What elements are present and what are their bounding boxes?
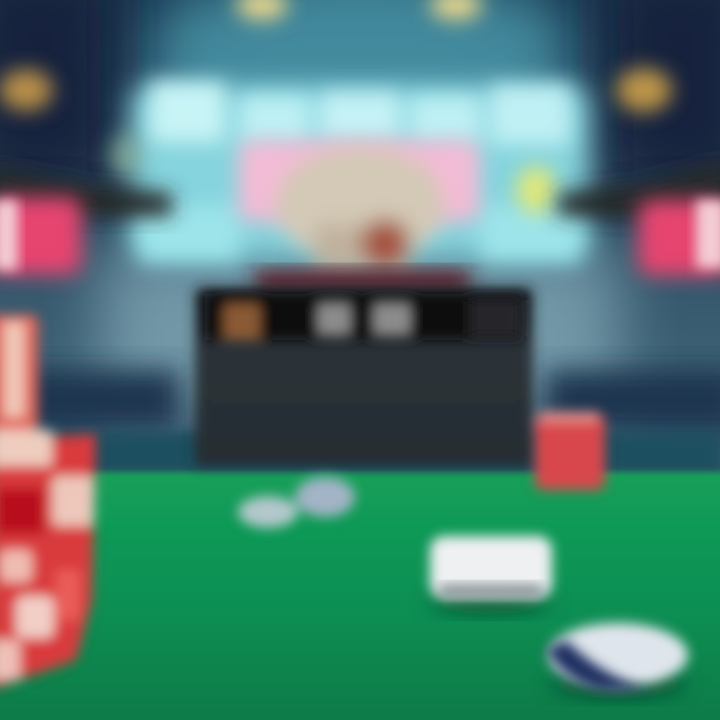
icon: ceiling lights (0, 0, 672, 214)
icon: right arm with pink chip (558, 160, 720, 276)
icon: red and white chip stack (0, 315, 96, 690)
icon: red cup (535, 412, 605, 490)
panel: pink backdrop behind cards (238, 140, 480, 222)
icon: small chips in centre (238, 477, 355, 528)
icon: left arm with pink chip (0, 165, 172, 275)
panel: dark scoreboard (195, 270, 533, 466)
icon: fan of cards (276, 147, 444, 271)
screen: glowing display (130, 82, 590, 260)
scoreboard top strip (205, 294, 523, 340)
icon: blue and white chip (546, 623, 688, 698)
icon: white chip stack (430, 536, 552, 614)
table: green felt (0, 472, 720, 720)
